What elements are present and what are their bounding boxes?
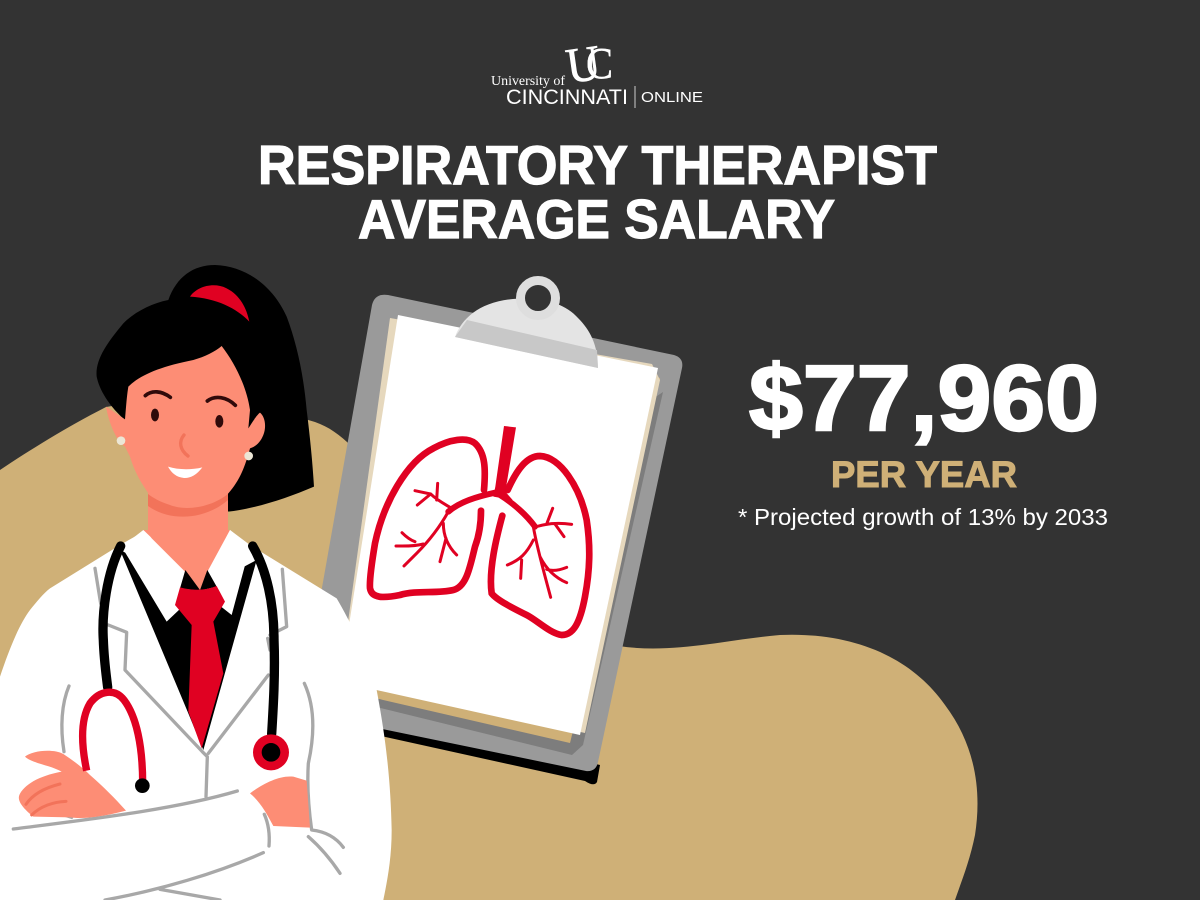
smile xyxy=(168,467,202,478)
logo text: Online: ONLINE xyxy=(641,89,703,106)
eyes and brows xyxy=(145,392,235,405)
clipboard shadow xyxy=(340,700,600,784)
title: AVERAGE SALARY xyxy=(358,188,835,250)
logo xyxy=(491,34,703,109)
left hand xyxy=(19,751,126,818)
lungs icon xyxy=(370,426,589,635)
lab coat and accessories xyxy=(0,530,392,900)
background tan blob xyxy=(0,402,977,900)
growth note: * Projected growth of 13% by 2033 xyxy=(738,504,1108,530)
collar xyxy=(122,530,200,622)
under sheets xyxy=(340,320,660,743)
title xyxy=(258,134,937,250)
clipboard board xyxy=(300,295,682,771)
earrings xyxy=(117,436,125,445)
clipboard clip xyxy=(455,280,598,368)
paper sheet xyxy=(340,315,658,735)
nose xyxy=(181,435,188,456)
salary callout xyxy=(738,346,1108,530)
title: RESPIRATORY THERAPIST xyxy=(258,134,937,196)
hair xyxy=(97,265,314,512)
per year label: PER YEAR xyxy=(831,454,1017,495)
hair band xyxy=(190,285,249,322)
neck shadow xyxy=(148,494,228,517)
logo monogram: C xyxy=(586,39,613,88)
doctor illustration xyxy=(0,265,392,900)
logo monogram: U xyxy=(563,34,604,94)
face xyxy=(106,346,265,508)
coat lines xyxy=(13,568,343,900)
clipboard xyxy=(300,280,682,784)
neck center xyxy=(143,530,230,590)
stethoscope xyxy=(83,546,274,783)
logo text: Cincinnati: CINCINNATI xyxy=(506,86,628,109)
salary figure: $77,960 xyxy=(749,346,1099,450)
right hand xyxy=(250,776,310,828)
logo text: University of: University of xyxy=(491,74,565,89)
neck xyxy=(122,490,250,592)
shirt xyxy=(120,550,257,750)
tie xyxy=(175,586,225,748)
